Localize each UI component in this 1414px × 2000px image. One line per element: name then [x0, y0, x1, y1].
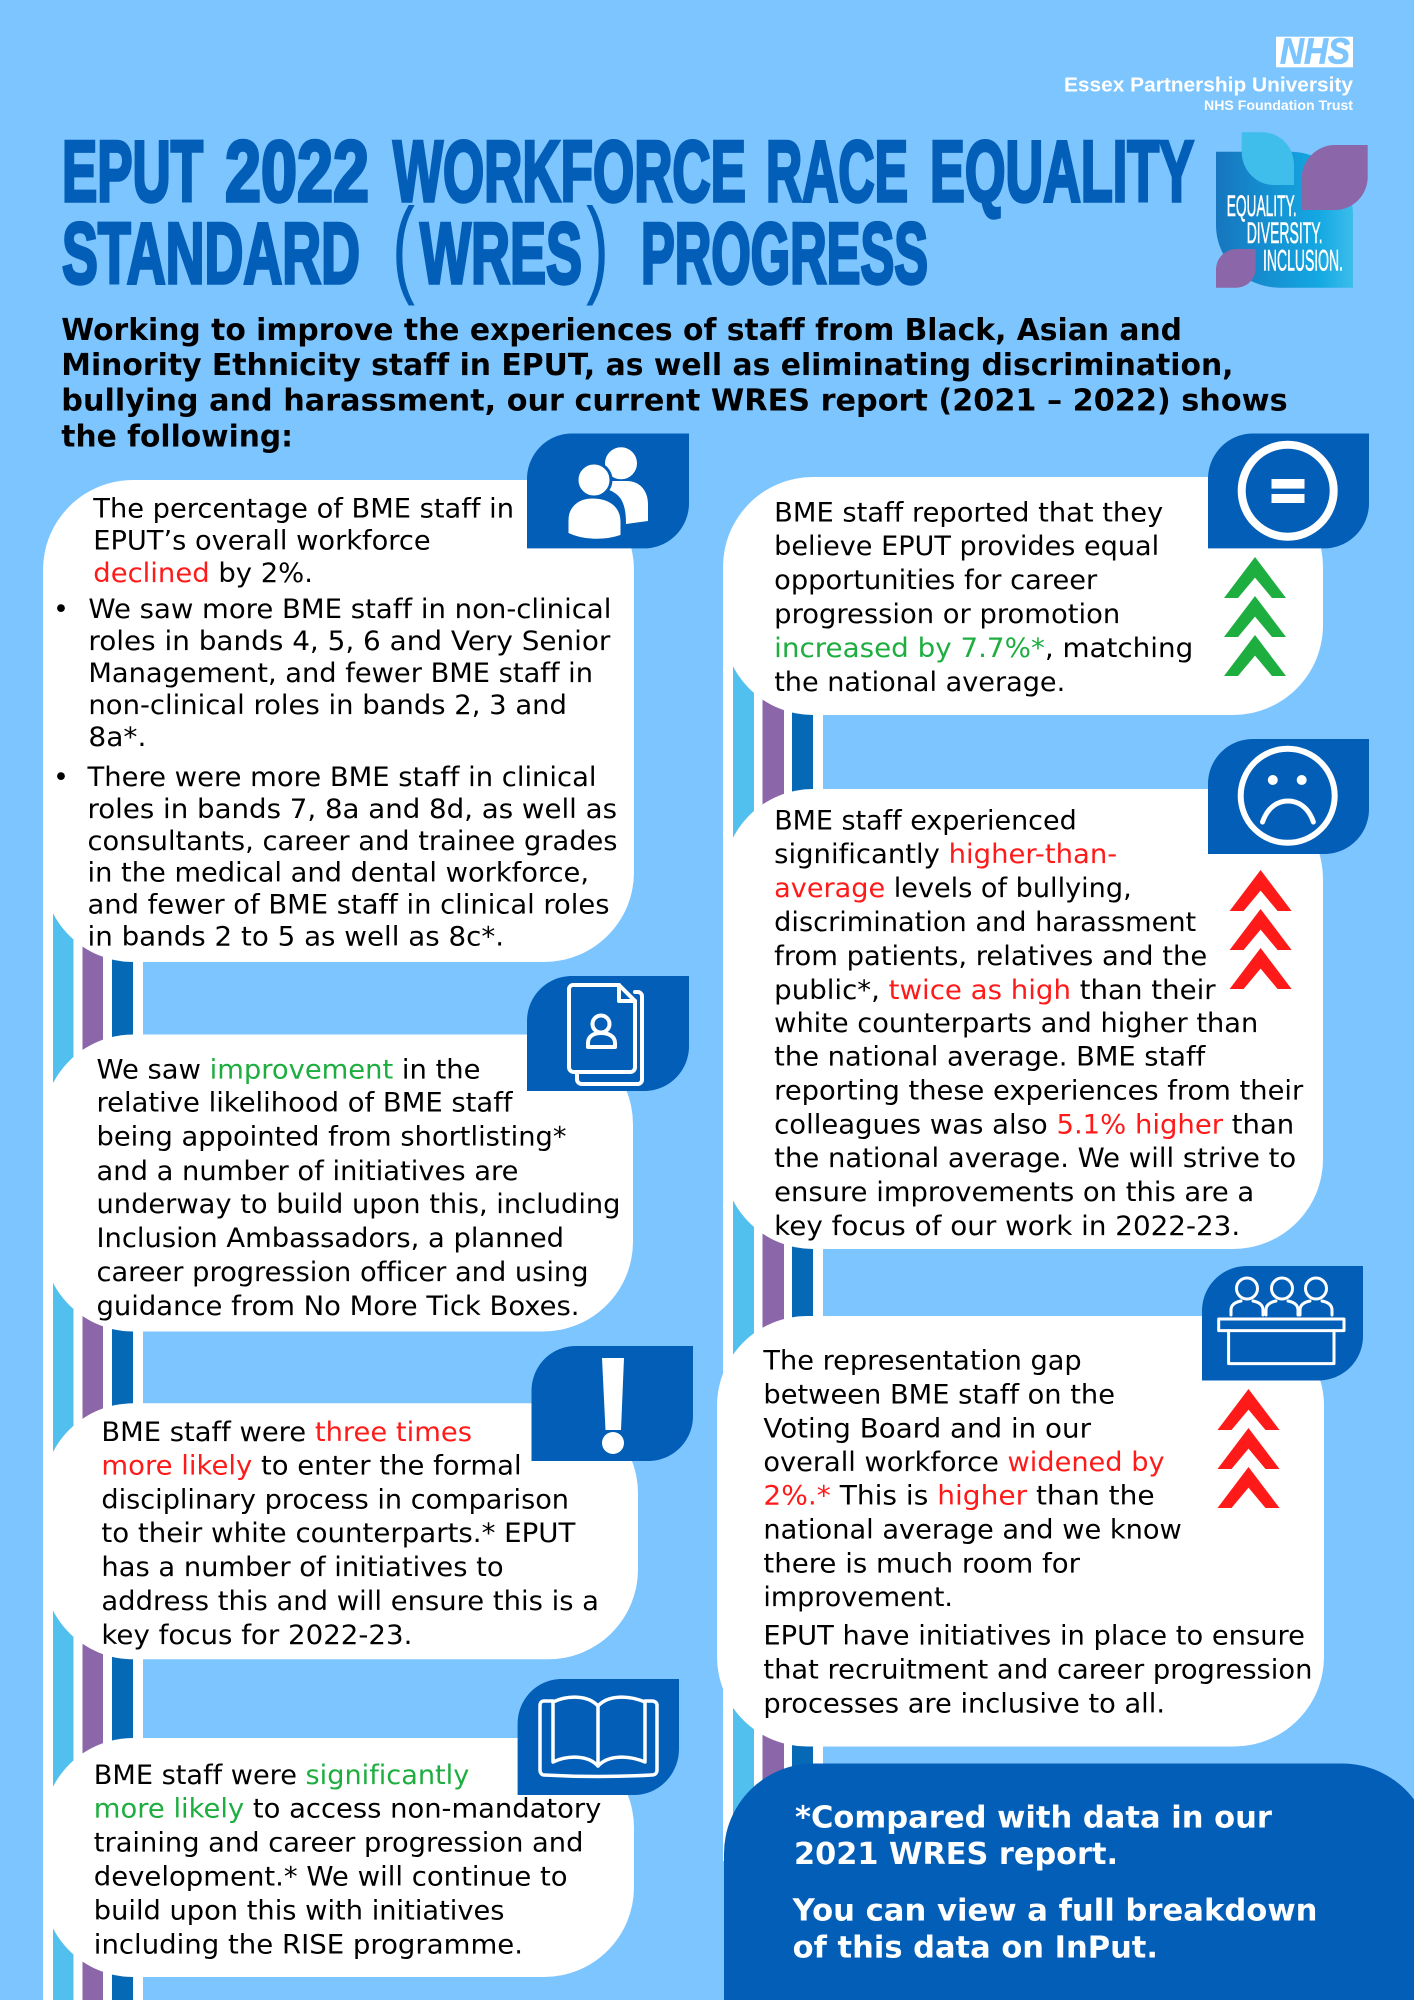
text: bullying: public*, twice as high than their [774, 975, 1217, 1006]
panel: equal opportunities [723, 434, 1369, 715]
text: disciplinary [101, 1417, 599, 1651]
title: PROGRESS [641, 206, 928, 302]
text: equal opportunities: BME staff reported that they [774, 497, 1163, 528]
icon: board panel [1202, 1266, 1363, 1380]
text: bullying: discrimination and harassment [774, 907, 1196, 938]
text: equal opportunities [774, 497, 1193, 698]
text: representation gap [762, 1345, 1312, 1720]
title: STANDARD [62, 206, 360, 302]
text: shortlisting: career progression officer and using [96, 1257, 588, 1288]
title: RACE [766, 124, 908, 220]
text: workforce percentage: non-clinical roles in bands 2, 3 and [88, 690, 567, 721]
text: bullying: white counterparts and higher than [774, 1008, 1258, 1039]
text: bullying: BME staff experienced [774, 806, 1077, 836]
text: workforce percentage: We saw more BME staff in non-clinical [88, 594, 611, 625]
title [62, 124, 1194, 306]
title: 2022 [225, 124, 369, 220]
icon: people [527, 434, 689, 548]
text: equal opportunities: opportunities for career [774, 565, 1098, 596]
text: representation gap: improvement. [763, 1582, 953, 1613]
NHS logo: Essex Partnership University [1064, 75, 1354, 97]
text: shortlisting [96, 1054, 620, 1322]
panel: voting board representation [717, 1266, 1363, 1746]
text: disciplinary: disciplinary process in comparison [101, 1484, 569, 1515]
text: representation gap: Voting Board and in our [763, 1413, 1092, 1444]
text: workforce percentage: roles in bands 4, 5, 6 and Very Senior [88, 626, 611, 657]
text: disciplinary: BME staff were three times [101, 1417, 472, 1448]
text: footnote: *Compared with data in our [795, 1800, 1272, 1836]
panel: non-mandatory training [43, 1679, 679, 1977]
panel: appointed from shortlisting [43, 976, 689, 1332]
text: disciplinary: to their white counterparts.* EPUT [101, 1518, 576, 1549]
text: footnote: You can view a full breakdown [792, 1894, 1318, 1929]
text: training: training and career progression and [94, 1827, 583, 1858]
decorative stripes: left column [43, 860, 143, 2000]
text: workforce percentage: declined by 2%. [93, 558, 313, 589]
text: equal opportunities: the national average. [774, 667, 1065, 698]
text: workforce percentage: • [53, 762, 69, 793]
panel: footnote [724, 1764, 1414, 2000]
text: footnote: of this data on InPut. [793, 1930, 1158, 1965]
title: WRES [420, 206, 582, 302]
text: bullying: from patients, relatives and the [774, 941, 1207, 972]
logo: equality diversity inclusion: EQUALITY. [1227, 190, 1297, 223]
text: bullying [774, 806, 1304, 1242]
text: shortlisting: underway to build upon this, including [96, 1189, 620, 1220]
text: representation gap: national average and we know [763, 1515, 1182, 1546]
text: bullying: the national average. We will strive to [774, 1143, 1296, 1174]
icon: green up chevrons [1224, 557, 1286, 676]
title: EPUT [62, 124, 203, 220]
icon: red up chevrons [1218, 1389, 1280, 1508]
text: bullying: significantly higher-than- [774, 839, 1117, 870]
text: workforce percentage: • [53, 594, 69, 625]
icon: equals in circle [1208, 434, 1369, 548]
text: shortlisting: guidance from No More Tick Boxes. [96, 1291, 580, 1322]
title: EQUALITY [930, 124, 1194, 220]
logo: equality diversity inclusion: DIVERSITY. [1247, 217, 1323, 250]
text: workforce percentage: There were more BME staff in clinical [86, 762, 597, 793]
text: representation gap: EPUT have initiatives in place to ensure [763, 1621, 1305, 1652]
subtitle: Minority Ethnicity staff in EPUT, as well as eliminating discrimination, [61, 348, 1233, 383]
text: equal opportunities: believe EPUT provides equal [774, 531, 1159, 562]
text: workforce percentage [53, 494, 618, 953]
text: representation gap: processes are inclusive to all. [763, 1689, 1165, 1720]
NHS logo [1064, 30, 1354, 113]
text: representation gap: 2%.* This is higher than the [763, 1481, 1155, 1512]
icon: exclamation mark [532, 1346, 693, 1461]
text: disciplinary: has a number of initiatives to [101, 1552, 504, 1583]
logo: equality diversity inclusion [1216, 132, 1368, 288]
decorative stripes: right column [723, 611, 823, 1861]
text: workforce percentage: roles in bands 7, 8a and 8d, as well as [88, 794, 617, 825]
text: footnote [792, 1800, 1318, 1965]
NHS logo: NHS Foundation Trust [1204, 97, 1353, 113]
text: bullying: colleagues was also 5.1% higher than [774, 1109, 1294, 1140]
text: workforce percentage: EPUT’s overall workforce [93, 526, 431, 557]
text: disciplinary: key focus for 2022-23. [101, 1620, 412, 1651]
text: bullying: reporting these experiences from their [774, 1075, 1304, 1106]
subtitle [61, 313, 1288, 455]
text: shortlisting: We saw improvement in the [96, 1054, 480, 1085]
text: equal opportunities: increased by 7.7%* , matching [774, 633, 1193, 664]
text: workforce percentage: in bands 2 to 5 as well as 8c*. [88, 922, 504, 953]
text: representation gap: The representation gap [762, 1345, 1082, 1376]
text: training: more likely to access non-mandatory [94, 1794, 601, 1825]
icon: document with person [527, 976, 689, 1091]
text: disciplinary: address this and will ensure this is a [101, 1586, 599, 1617]
subtitle: the following: [61, 420, 293, 455]
text: training: development.* We will continue to [94, 1861, 568, 1892]
text: training: BME staff were significantly [94, 1760, 469, 1791]
text: representation gap: there is much room for [763, 1548, 1081, 1580]
text: workforce percentage: 8a*. [88, 722, 146, 753]
text: footnote: 2021 WRES report. [794, 1837, 1118, 1872]
icon: open book [518, 1679, 679, 1795]
text: bullying: key focus of our work in 2022-23. [774, 1211, 1240, 1242]
title: ( [392, 185, 415, 306]
text: training: build upon this with initiatives [94, 1895, 505, 1926]
icon: sad face [1208, 739, 1369, 854]
text: training [94, 1760, 601, 1960]
text: workforce percentage: Management, and fewer BME staff in [88, 658, 593, 689]
panel: disciplinary process [43, 1346, 693, 1659]
text: bullying: average levels of bullying, [774, 873, 1132, 904]
NHS logo: NHS [1280, 30, 1350, 72]
text: workforce percentage: consultants, career and trainee grades [88, 826, 618, 857]
text: shortlisting: Inclusion Ambassadors, a planned [96, 1223, 564, 1254]
subtitle: bullying and harassment, our current WRES report (2021 – 2022) shows [61, 384, 1288, 419]
panel: bullying and harassment [723, 739, 1369, 1249]
text: equal opportunities: progression or promotion [774, 599, 1120, 630]
text: bullying: ensure improvements on this are a [774, 1177, 1254, 1208]
text: training: including the RISE programme. [94, 1929, 523, 1960]
text: shortlisting: and a number of initiatives are [96, 1156, 518, 1187]
text: workforce percentage: The percentage of BME staff in [92, 494, 514, 525]
subtitle: Working to improve the experiences of staff from Black, Asian and [61, 313, 1182, 348]
text: bullying: the national average. BME staff [774, 1042, 1207, 1073]
text: workforce percentage: in the medical and dental workforce, [88, 858, 589, 889]
panel: BME share of workforce [43, 434, 689, 962]
text: disciplinary: more likely to enter the formal [101, 1451, 522, 1482]
title: ) [586, 185, 609, 306]
text: shortlisting: being appointed from shortlisting* [96, 1122, 566, 1153]
icon: red up chevrons [1230, 870, 1292, 989]
text: representation gap: overall workforce widened by [763, 1447, 1165, 1478]
text: representation gap: between BME staff on the [763, 1379, 1115, 1410]
text: representation gap: that recruitment and career progression [763, 1655, 1312, 1686]
text: shortlisting: relative likelihood of BME staff [96, 1088, 514, 1119]
title: WORKFORCE [393, 124, 746, 220]
text: workforce percentage: and fewer of BME staff in clinical roles [88, 890, 610, 921]
